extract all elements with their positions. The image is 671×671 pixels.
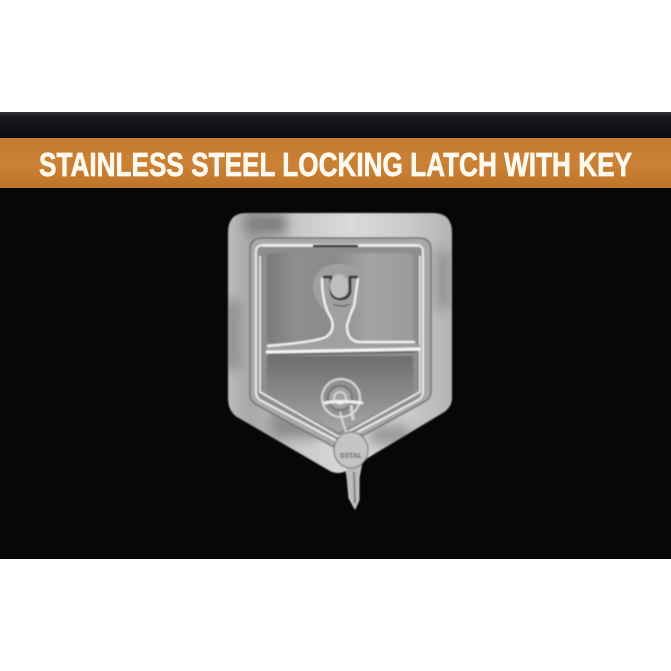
plate reflections xyxy=(226,214,450,445)
latch plate xyxy=(228,213,452,473)
recessed pan xyxy=(250,238,431,448)
lock cylinder xyxy=(322,379,363,420)
orange title banner xyxy=(0,138,671,188)
key xyxy=(334,412,368,509)
key: SSTAL xyxy=(340,453,363,460)
black toolbox body xyxy=(0,112,671,559)
product photo infographic xyxy=(0,112,671,559)
stainless steel latch xyxy=(226,213,452,473)
T-handle xyxy=(266,264,421,355)
